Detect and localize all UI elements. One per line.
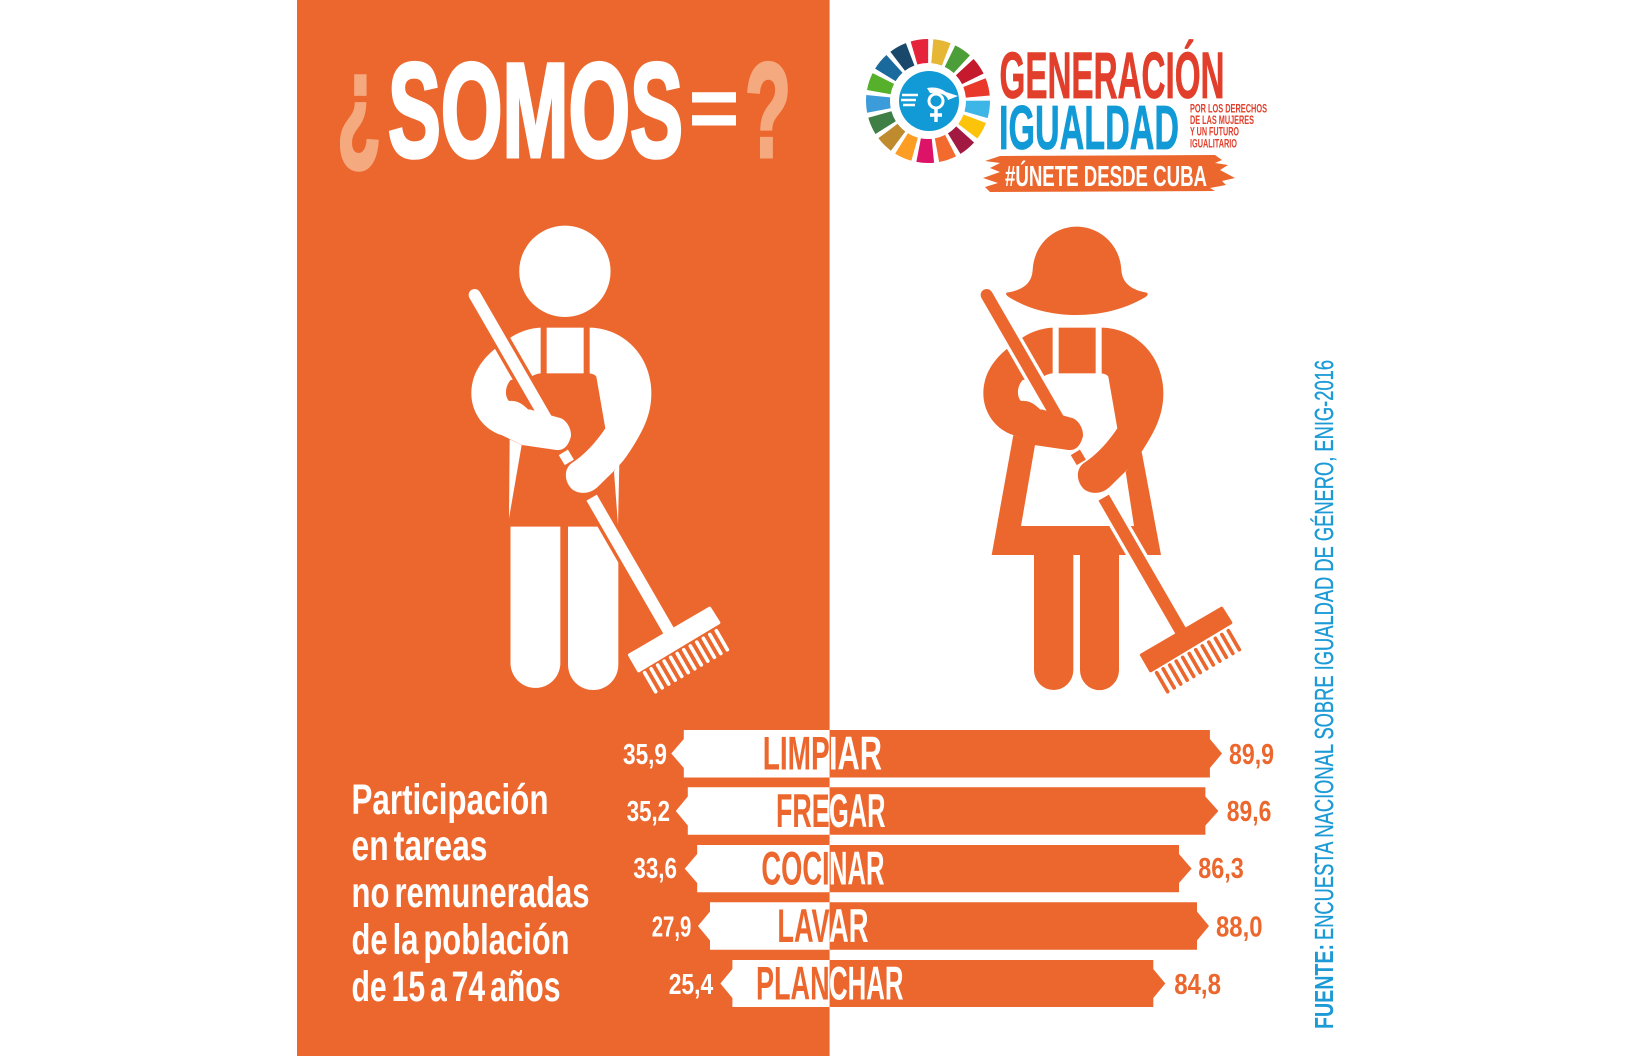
bar: planchar: 84,8 bbox=[1174, 969, 1221, 1001]
left arm bbox=[983, 328, 1053, 435]
bar: fregar: 35,2 bbox=[627, 796, 670, 828]
bar: fregar bbox=[627, 784, 1271, 837]
source note bbox=[1309, 360, 1339, 1029]
icon: man with apron and broom bbox=[471, 226, 727, 692]
title bbox=[337, 27, 791, 186]
bar: planchar: CHAR bbox=[829, 956, 904, 1010]
heading: Generación: GENERACIÓN bbox=[1000, 38, 1224, 112]
bristles bbox=[645, 631, 727, 692]
chest bib bbox=[1059, 328, 1096, 373]
text block: participation description: de 15 a 74 años bbox=[352, 963, 560, 1011]
bar: cocinar bbox=[633, 842, 1244, 894]
right arm bbox=[566, 328, 651, 493]
forearm and hand bbox=[498, 409, 571, 450]
right arm bbox=[1078, 328, 1163, 493]
apron bbox=[1013, 373, 1142, 526]
legs bbox=[510, 527, 618, 690]
title: = bbox=[689, 61, 739, 156]
text block: participation description bbox=[352, 776, 590, 1011]
broom head bbox=[630, 608, 719, 671]
left arm bbox=[471, 328, 541, 435]
icon: SDG colour wheel bbox=[857, 30, 999, 172]
heading: Igualdad: IGUALDAD bbox=[999, 94, 1179, 163]
chart: task participation bars bbox=[623, 726, 1274, 1010]
bar: limpiar: 35,9 bbox=[623, 739, 667, 771]
bar: cocinar: 33,6 bbox=[633, 853, 677, 885]
legs bbox=[1034, 553, 1119, 690]
icon: dove with female symbol bbox=[899, 71, 959, 131]
broom handle upper bbox=[475, 295, 548, 422]
dress bbox=[992, 435, 1161, 555]
hashtag brush banner: #ÚNETE DESDE CUBA bbox=[1005, 159, 1207, 193]
bar: limpiar: IAR bbox=[829, 726, 882, 780]
chest bib bbox=[547, 328, 584, 373]
bar: limpiar: LIMP bbox=[763, 726, 830, 780]
bar: cocinar: COCI bbox=[761, 842, 830, 894]
bar: planchar bbox=[669, 956, 1221, 1010]
bar: lavar: 27,9 bbox=[652, 912, 691, 944]
bar: planchar: PLAN bbox=[756, 956, 830, 1010]
apron edges bbox=[509, 439, 619, 525]
icon: woman with hat, apron and broom bbox=[983, 227, 1239, 692]
bar: cocinar: 86,3 bbox=[1198, 853, 1244, 885]
tagline bbox=[1190, 104, 1267, 151]
broom handle lower bbox=[1102, 494, 1182, 633]
broom handle lower bbox=[590, 494, 670, 633]
tagline: POR LOS DERECHOS bbox=[1190, 104, 1267, 116]
source note: ENCUESTA NACIONAL SOBRE IGUALDAD DE GÉNERO, ENIG-2016 bbox=[1309, 360, 1339, 940]
title: SOMOS bbox=[388, 36, 683, 186]
bar: lavar bbox=[652, 899, 1262, 952]
source note: FUENTE: bbox=[1309, 944, 1339, 1029]
text block: participation description: de la población bbox=[352, 916, 570, 964]
bar: fregar: GAR bbox=[829, 784, 886, 837]
bar: lavar: LAV bbox=[777, 899, 830, 952]
logo: Generación Igualdad bbox=[857, 30, 1267, 193]
text block: participation description: en tareas bbox=[352, 822, 488, 870]
title: ? bbox=[745, 36, 791, 186]
handle stub bbox=[1075, 452, 1081, 462]
head bbox=[519, 226, 611, 317]
text block: participation description: no remuneradas bbox=[352, 869, 590, 917]
bristles bbox=[1157, 631, 1239, 692]
bar: limpiar: 89,9 bbox=[1229, 739, 1274, 771]
panel: orange left half bbox=[297, 0, 830, 1056]
handle stub bbox=[563, 452, 569, 462]
bar: planchar: 25,4 bbox=[669, 969, 713, 1001]
tagline: DE LAS MUJERES bbox=[1190, 115, 1254, 127]
broom handle upper bbox=[987, 295, 1060, 422]
forearm and hand bbox=[1010, 409, 1083, 450]
broom head bbox=[1142, 608, 1231, 671]
bar: fregar: 89,6 bbox=[1227, 796, 1271, 828]
title: ¿ bbox=[337, 27, 381, 176]
bar: lavar: 88,0 bbox=[1216, 912, 1262, 944]
bar: cocinar: NAR bbox=[829, 842, 884, 894]
text block: participation description: Participación bbox=[352, 776, 548, 824]
tagline: Y UN FUTURO bbox=[1190, 127, 1239, 139]
tagline: IGUALITARIO bbox=[1190, 139, 1237, 151]
hashtag brush banner bbox=[983, 155, 1235, 193]
hat bbox=[1006, 227, 1148, 315]
bar: limpiar bbox=[623, 726, 1274, 780]
bar: lavar: AR bbox=[829, 899, 868, 952]
bar: fregar: FRE bbox=[776, 784, 830, 837]
